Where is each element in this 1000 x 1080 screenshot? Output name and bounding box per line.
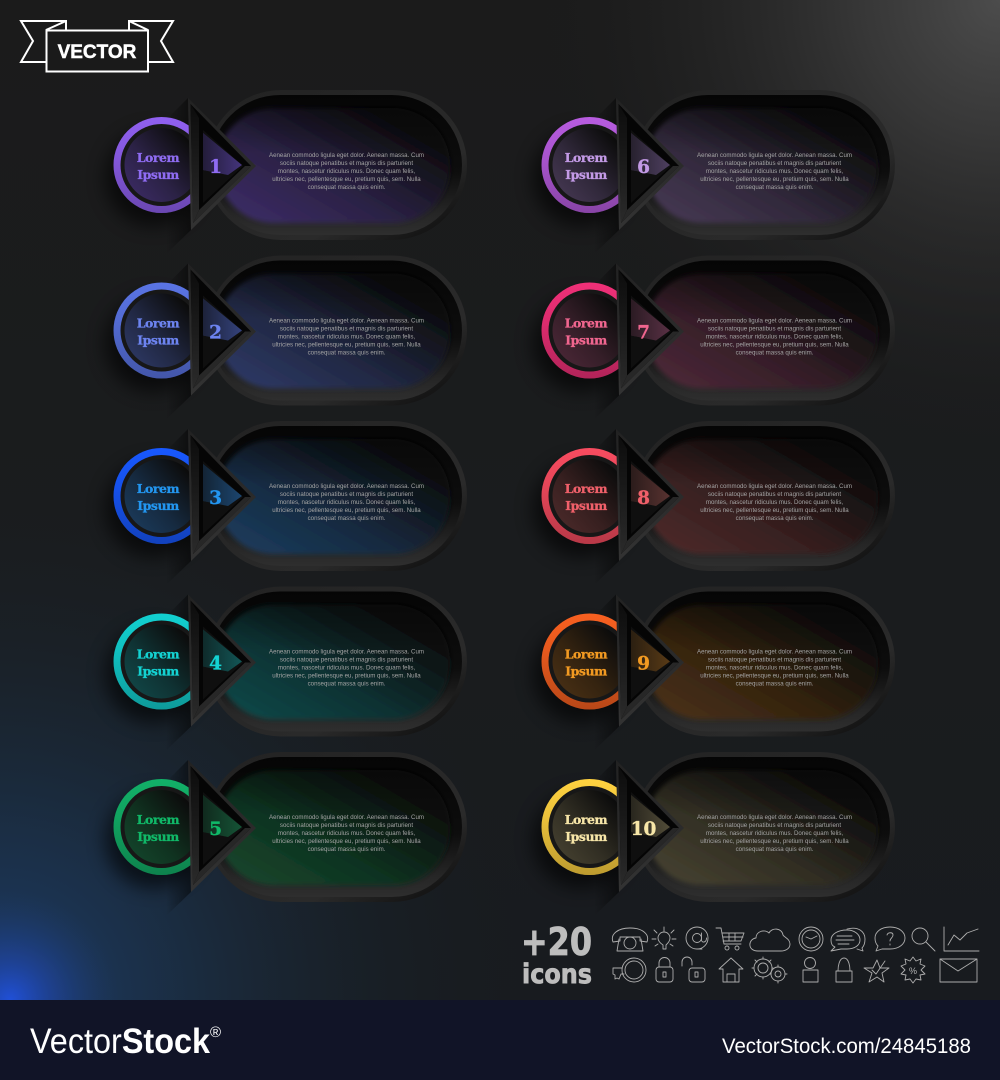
panel 9: sociis natoque penatibus et magnis dis parturient xyxy=(708,656,841,664)
panel 3: montes, nascetur ridiculus mus. Donec quam felis, xyxy=(278,499,415,506)
panel 10: montes, nascetur ridiculus mus. Donec quam felis, xyxy=(706,830,843,837)
panel 4 xyxy=(105,586,467,750)
panel 8: Ipsum xyxy=(565,498,607,513)
panel 3: Aenean commodo ligula eget dolor. Aenean massa. Cum xyxy=(269,483,424,490)
icon: magnifier xyxy=(912,928,935,951)
panel 1: Lorem xyxy=(137,150,180,165)
panel 8 xyxy=(533,421,895,585)
panel 5 xyxy=(105,752,467,916)
panel 4: ultricies nec, pellentesque eu, pretium quis, sem. Nulla xyxy=(272,672,421,680)
panel 6: consequat massa quis enim. xyxy=(736,184,814,191)
panel 1: consequat massa quis enim. xyxy=(308,184,386,191)
panel 1: sociis natoque penatibus et magnis dis parturient xyxy=(280,160,413,167)
panel 9: ultricies nec, pellentesque eu, pretium quis, sem. Nulla xyxy=(700,672,849,680)
panel 7: consequat massa quis enim. xyxy=(736,350,814,356)
panel 10: ultricies nec, pellentesque eu, pretium quis, sem. Nulla xyxy=(700,838,849,845)
panel 2: Ipsum xyxy=(137,332,179,348)
panel 2 xyxy=(105,256,467,420)
icon: cloud xyxy=(750,929,790,951)
icon: clock xyxy=(799,927,823,951)
panel 7: 7 xyxy=(637,322,650,344)
panel 1: Aenean commodo ligula eget dolor. Aenean massa. Cum xyxy=(269,152,424,159)
icon: open lock xyxy=(682,957,705,982)
panel 9 xyxy=(533,586,895,750)
panel 10: Ipsum xyxy=(565,829,607,844)
panel 1: montes, nascetur ridiculus mus. Donec quam felis, xyxy=(278,168,415,175)
panel 5: 5 xyxy=(209,819,222,840)
panel 6: montes, nascetur ridiculus mus. Donec quam felis, xyxy=(706,168,843,175)
panel 6: Ipsum xyxy=(565,167,607,182)
panel 7 xyxy=(533,256,895,420)
panel 5: Ipsum xyxy=(137,829,179,844)
panel 2: Lorem xyxy=(137,316,180,330)
panel 10: 10 xyxy=(631,819,656,840)
panel 1 xyxy=(105,90,467,254)
+20 icons heading xyxy=(521,920,592,990)
panel 10: Aenean commodo ligula eget dolor. Aenean massa. Cum xyxy=(697,814,852,821)
panel 8: montes, nascetur ridiculus mus. Donec quam felis, xyxy=(706,499,843,506)
panel 1: ultricies nec, pellentesque eu, pretium quis, sem. Nulla xyxy=(272,176,421,183)
icon: closed lock xyxy=(656,958,673,982)
icon: telephone xyxy=(612,928,648,951)
panel 2: consequat massa quis enim. xyxy=(308,350,386,356)
panel 9: Aenean commodo ligula eget dolor. Aenean massa. Cum xyxy=(697,648,852,656)
vector ribbon badge xyxy=(21,21,173,72)
panel 4: Lorem xyxy=(137,646,180,662)
image id: VectorStock.com/24845188 xyxy=(722,1035,971,1058)
panel 3: 3 xyxy=(209,488,222,509)
panel 3: Lorem xyxy=(137,481,180,496)
panel 7: Aenean commodo ligula eget dolor. Aenean massa. Cum xyxy=(697,318,852,324)
panel 4: sociis natoque penatibus et magnis dis parturient xyxy=(280,656,413,664)
icon: man xyxy=(803,958,818,982)
panel 9: Lorem xyxy=(565,646,608,662)
panel 3: consequat massa quis enim. xyxy=(308,515,386,522)
panel 10: sociis natoque penatibus et magnis dis parturient xyxy=(708,822,841,829)
panel 2: ultricies nec, pellentesque eu, pretium quis, sem. Nulla xyxy=(272,342,421,348)
icon: question bubble xyxy=(875,927,905,951)
panel 9: 9 xyxy=(637,654,650,674)
registered mark: ® xyxy=(210,1024,221,1041)
icon: woman xyxy=(836,958,852,982)
panel 3: sociis natoque penatibus et magnis dis parturient xyxy=(280,491,413,498)
panel 4: consequat massa quis enim. xyxy=(308,680,386,688)
panel 7: sociis natoque penatibus et magnis dis parturient xyxy=(708,326,841,332)
icon: percent badge xyxy=(901,957,925,983)
panel 4: 4 xyxy=(209,654,222,674)
panel 4: montes, nascetur ridiculus mus. Donec quam felis, xyxy=(278,664,415,672)
panel 8: ultricies nec, pellentesque eu, pretium quis, sem. Nulla xyxy=(700,507,849,514)
panel 2: montes, nascetur ridiculus mus. Donec quam felis, xyxy=(278,334,415,340)
panel 7: Lorem xyxy=(565,316,608,330)
panel 8: Lorem xyxy=(565,481,608,496)
panel 2: Aenean commodo ligula eget dolor. Aenean massa. Cum xyxy=(269,318,424,324)
icon: star with check xyxy=(864,960,889,982)
icon set xyxy=(612,927,979,983)
vector ribbon badge: VECTOR xyxy=(58,42,137,63)
icon: at sign xyxy=(686,927,708,949)
icon: shopping cart xyxy=(716,928,744,950)
icon: light bulb xyxy=(652,927,676,949)
panel 8: 8 xyxy=(637,488,650,509)
icon: envelope xyxy=(940,959,977,982)
panel 6: 6 xyxy=(637,157,650,178)
panel 6 xyxy=(533,90,895,254)
panel 4: Ipsum xyxy=(137,664,179,678)
panel 3: Ipsum xyxy=(137,498,179,513)
panel 5: Aenean commodo ligula eget dolor. Aenean massa. Cum xyxy=(269,814,424,821)
panel 7: ultricies nec, pellentesque eu, pretium quis, sem. Nulla xyxy=(700,342,849,348)
icon: percent badge: % xyxy=(909,966,917,976)
panel 6: ultricies nec, pellentesque eu, pretium quis, sem. Nulla xyxy=(700,176,849,183)
panel 3: ultricies nec, pellentesque eu, pretium quis, sem. Nulla xyxy=(272,507,421,514)
+20 icons heading: icons xyxy=(522,959,592,990)
panel 3 xyxy=(105,421,467,585)
panel 10: Lorem xyxy=(565,812,608,827)
panel 6: Aenean commodo ligula eget dolor. Aenean massa. Cum xyxy=(697,152,852,159)
panel 8: Aenean commodo ligula eget dolor. Aenean massa. Cum xyxy=(697,483,852,490)
icon: house xyxy=(719,958,743,982)
panel 2: sociis natoque penatibus et magnis dis parturient xyxy=(280,326,413,332)
icon: line chart xyxy=(944,927,979,951)
panel 4: Aenean commodo ligula eget dolor. Aenean massa. Cum xyxy=(269,648,424,656)
icon: gears xyxy=(752,957,787,983)
panel 8: consequat massa quis enim. xyxy=(736,515,814,522)
panel 9: Ipsum xyxy=(565,664,607,678)
panel 5: sociis natoque penatibus et magnis dis parturient xyxy=(280,822,413,829)
panel 1: 1 xyxy=(209,157,222,178)
bottom bar xyxy=(0,1000,1000,1080)
icon: chat bubbles xyxy=(831,928,865,951)
panel 2: 2 xyxy=(209,322,222,344)
panel 10 xyxy=(533,752,895,916)
panel 6: Lorem xyxy=(565,150,608,165)
vectorstock logo: VectorStock xyxy=(30,1022,210,1061)
panel 5: consequat massa quis enim. xyxy=(308,846,386,853)
panel 7: Ipsum xyxy=(565,332,607,348)
panel 5: ultricies nec, pellentesque eu, pretium quis, sem. Nulla xyxy=(272,838,421,845)
panel 8: sociis natoque penatibus et magnis dis parturient xyxy=(708,491,841,498)
panel 6: sociis natoque penatibus et magnis dis parturient xyxy=(708,160,841,167)
panel 10: consequat massa quis enim. xyxy=(736,846,814,853)
panel 9: consequat massa quis enim. xyxy=(736,680,814,688)
panel 9: montes, nascetur ridiculus mus. Donec quam felis, xyxy=(706,664,843,672)
+20 icons heading: +20 xyxy=(521,920,592,964)
panel 1: Ipsum xyxy=(137,167,179,182)
panel 5: montes, nascetur ridiculus mus. Donec quam felis, xyxy=(278,830,415,837)
panel 7: montes, nascetur ridiculus mus. Donec quam felis, xyxy=(706,334,843,340)
icon: key xyxy=(613,958,646,982)
panel 5: Lorem xyxy=(137,812,180,827)
